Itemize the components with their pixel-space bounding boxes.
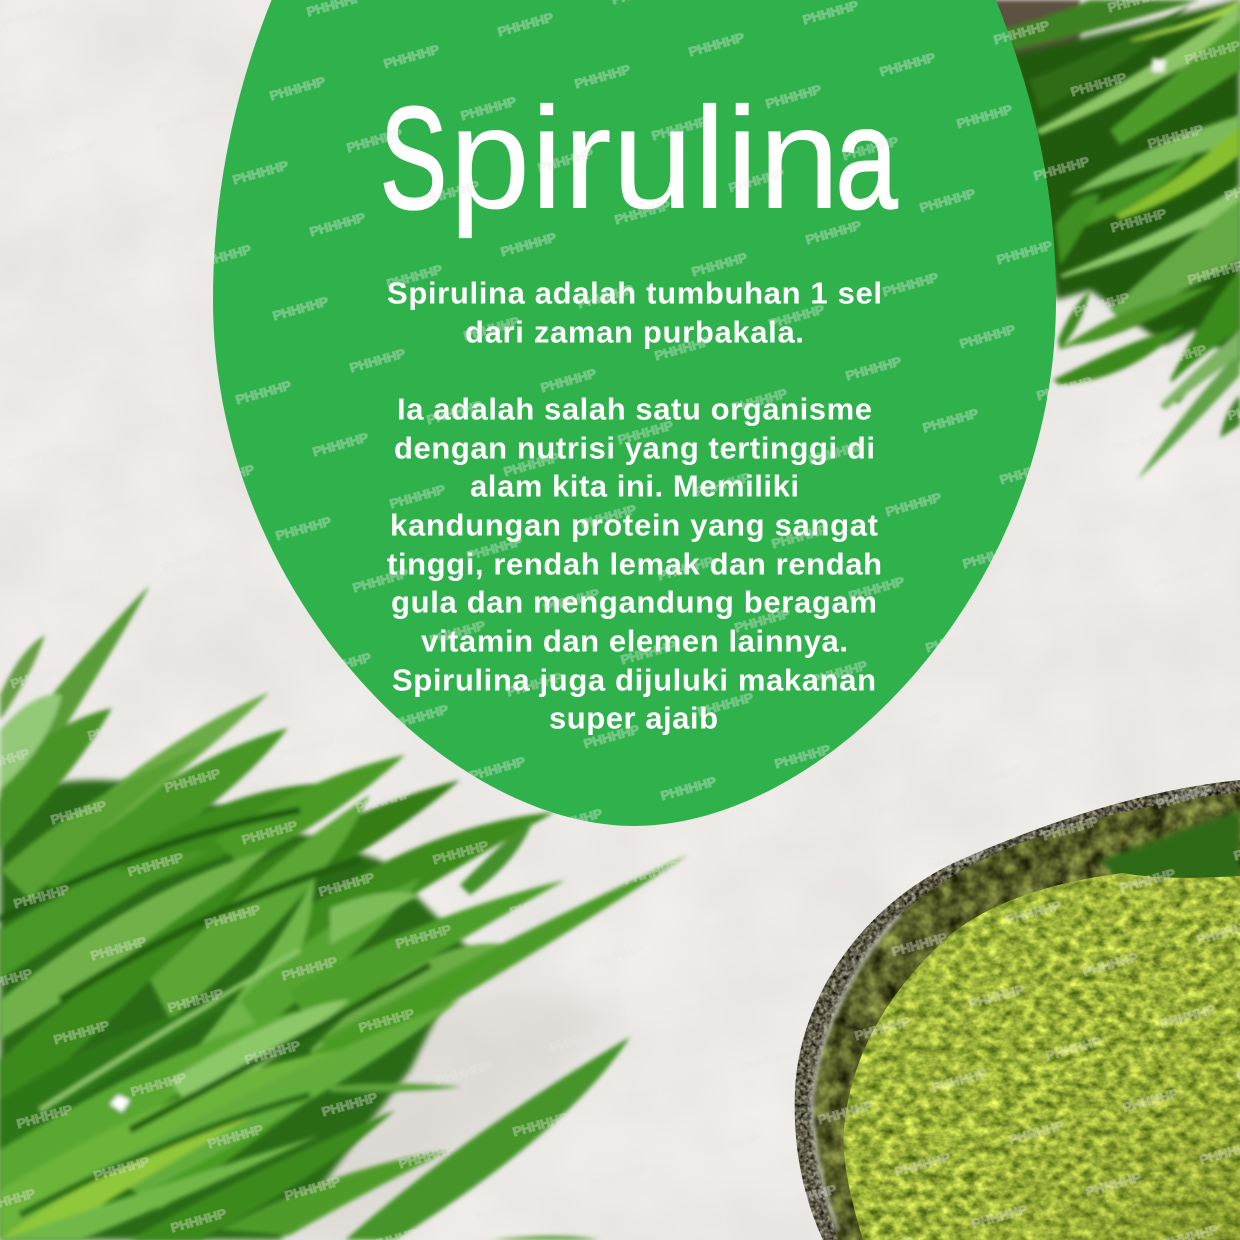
bowl inner highlight — [812, 915, 900, 1230]
title: pirulin — [449, 77, 840, 239]
text block: description: vitamin dan elemen lainnya. — [421, 624, 848, 658]
text block: description: gula dan mengandung beragam — [391, 584, 877, 620]
text block: description: kandungan protein yang sangat — [390, 508, 878, 542]
text block: description: Ia adalah salah satu organisme — [397, 392, 872, 426]
title: S — [380, 77, 447, 239]
photo: wheatgrass top right — [985, 0, 1240, 480]
text block: description: dari zaman purbakala. — [465, 314, 804, 350]
text block: description — [387, 276, 882, 736]
text block: description: alam kita ini. Memiliki — [470, 468, 799, 504]
text block: description: dengan nutrisi yang tertinggi di — [394, 430, 875, 466]
text block: description: Spirulina juga dijuluki makanan — [392, 662, 876, 698]
dark green patch — [1100, 810, 1240, 880]
panel: green egg-shaped title panel — [213, 0, 1056, 826]
photo: wheatgrass bottom left — [0, 585, 688, 1240]
bowl inner wall — [812, 792, 1240, 1240]
bowl rim — [795, 780, 1240, 1240]
powder shading — [844, 873, 1240, 1240]
photo: bowl of green spirulina powder — [795, 780, 1240, 1240]
title: a — [836, 77, 898, 239]
text block: description: super ajaib — [549, 700, 718, 736]
text block: description: tinggi, rendah lemak dan rendah — [387, 546, 882, 582]
text block: description: Spirulina adalah tumbuhan 1 sel — [387, 276, 882, 310]
powder — [844, 873, 1240, 1240]
